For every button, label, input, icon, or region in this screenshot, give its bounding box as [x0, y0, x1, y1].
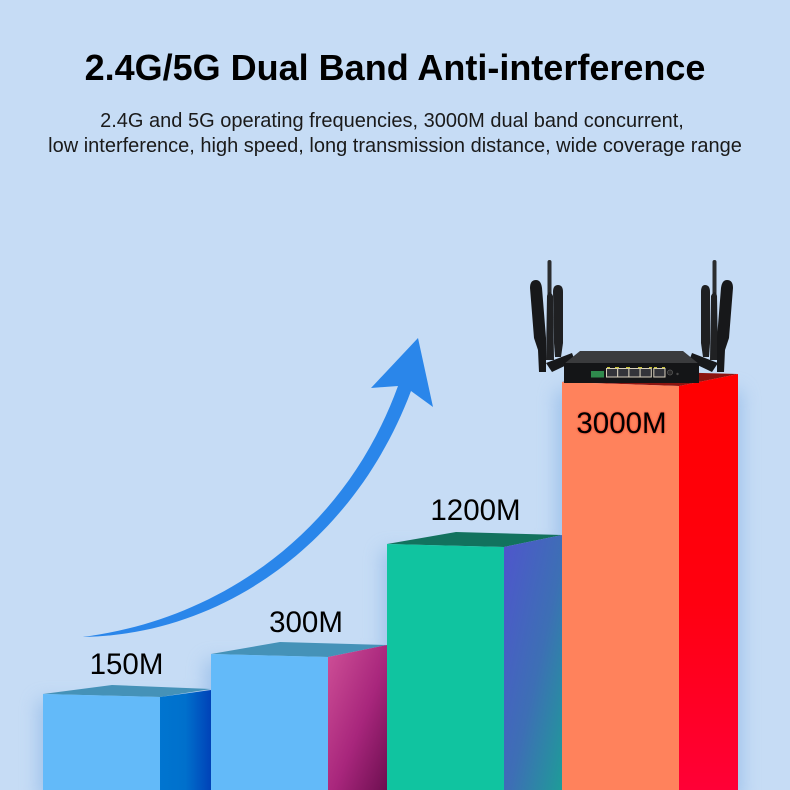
label: 300M: 300M: [269, 606, 343, 639]
ethernet ports: [606, 368, 665, 377]
router body top: [564, 351, 699, 364]
left antennas: [530, 260, 575, 372]
reset button: [676, 373, 679, 375]
bar: 300M: [211, 642, 387, 790]
subtitle text: low interference, high speed, long transmission distance, wide coverage range: [48, 135, 742, 157]
power jack: [667, 370, 673, 375]
bar: 3000M: [562, 371, 738, 790]
label: 1200M: 1200M: [430, 494, 521, 527]
port LEDs: [607, 367, 665, 368]
growth arrow: [82, 338, 433, 637]
router front panel: [564, 363, 699, 383]
bar shadows: [38, 390, 742, 790]
right antennas: [689, 260, 733, 372]
bar: 150M: [43, 685, 211, 790]
router with antennas: [530, 260, 733, 383]
subtitle text: [48, 110, 742, 157]
label: 3000M: 3000M: [576, 407, 667, 440]
title: 2.4G/5G Dual Band Anti-interference: [85, 47, 705, 88]
terminal block: [591, 371, 604, 378]
bar: 1200M: [387, 532, 562, 790]
label: 150M: 150M: [90, 648, 163, 681]
subtitle text: 2.4G and 5G operating frequencies, 3000M dual band concurrent,: [100, 110, 684, 132]
